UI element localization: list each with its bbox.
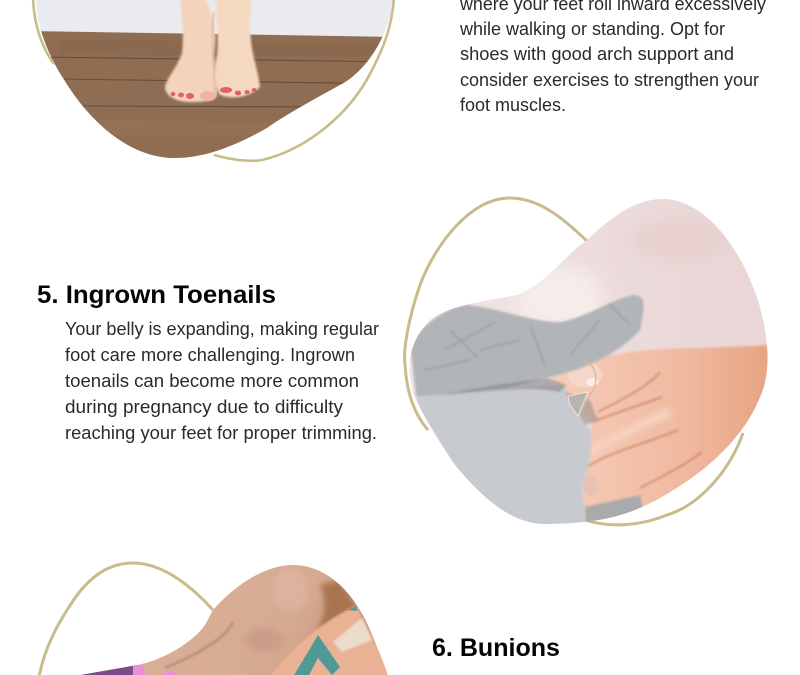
photo: gloved hands treating a toe (400, 190, 780, 540)
text block: ingrown toenails: Your belly is expanding, making regular (65, 319, 379, 339)
text block: ingrown toenails (65, 319, 379, 443)
heading: 6. Bunions: 6. Bunions (432, 634, 560, 662)
photo: hands with glitter nails and tattoo (39, 560, 400, 675)
text block: ingrown toenails: during pregnancy due to difficulty (65, 397, 343, 417)
heading: 5. Ingrown Toenails: 5. Ingrown Toenails (37, 281, 276, 309)
ring on toe (578, 360, 596, 416)
text block: overpronation tip: while walking or standing. Opt for (459, 19, 725, 39)
toenails (171, 87, 256, 99)
text block: overpronation tip: consider exercises to strengthen your (460, 70, 759, 90)
dark wrist corner (315, 578, 357, 630)
text block: overpronation tip: foot muscles. (460, 95, 566, 115)
forearm (270, 606, 395, 675)
glove lower (416, 386, 591, 540)
glove upper (410, 295, 644, 398)
finger crease (165, 622, 233, 668)
bottom grey strip (584, 494, 644, 522)
text block: ingrown toenails: toenails can become more common (65, 371, 359, 391)
left foot (165, 0, 217, 102)
text block: ingrown toenails: reaching your feet for proper trimming. (65, 423, 377, 443)
text block: ingrown toenails: foot care more challenging. Ingrown (65, 345, 355, 365)
text block: overpronation tip (459, 0, 766, 115)
text block: overpronation tip: shoes with good arch support and (460, 44, 734, 64)
right foot (215, 0, 260, 97)
photo: bare feet on wooden floor (30, 0, 400, 170)
toes (550, 344, 768, 522)
